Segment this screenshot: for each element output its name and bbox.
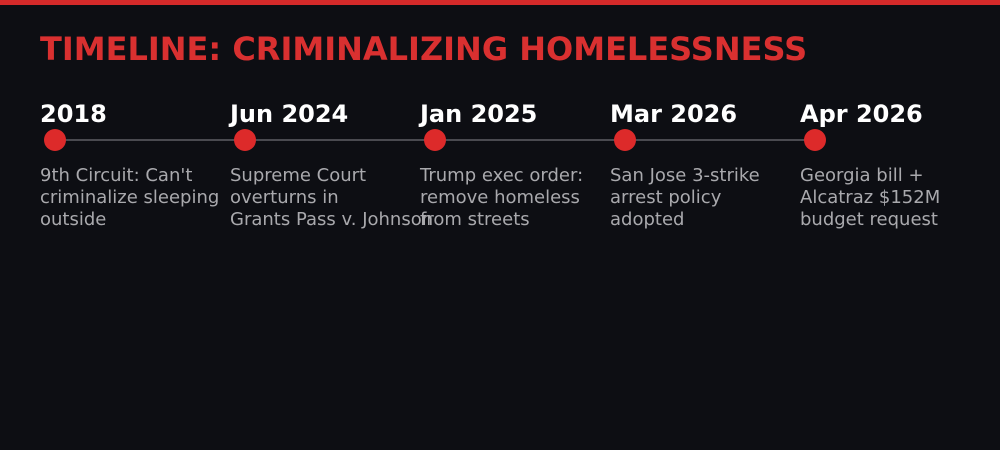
description: budget request: [800, 209, 938, 230]
description: San Jose 3-strike: [610, 165, 760, 186]
description: [420, 165, 583, 230]
description: Alcatraz $152M: [800, 187, 940, 208]
description: outside: [40, 209, 106, 230]
description: [40, 165, 219, 230]
dot marker: [424, 129, 446, 151]
description: criminalize sleeping: [40, 187, 219, 208]
title: TIMELINE: CRIMINALIZING HOMELESSNESS: [40, 30, 807, 68]
event: Mar 2026: [610, 100, 760, 230]
description: overturns in: [230, 187, 339, 208]
description: arrest policy: [610, 187, 721, 208]
dot marker: [614, 129, 636, 151]
dot marker: [234, 129, 256, 151]
dot marker: [44, 129, 66, 151]
date Mar 2026: Mar 2026: [610, 100, 737, 128]
description: [800, 165, 940, 230]
event: Jan 2025: [418, 100, 583, 230]
date Apr 2026: Apr 2026: [800, 100, 923, 128]
description: [230, 165, 433, 230]
event: 2018: [40, 100, 219, 230]
description: Trump exec order:: [420, 165, 583, 186]
description: 9th Circuit: Can't: [40, 165, 192, 186]
dot marker: [804, 129, 826, 151]
description: [610, 165, 760, 230]
description: adopted: [610, 209, 684, 230]
description: Grants Pass v. Johnson: [230, 209, 433, 230]
description: remove homeless: [420, 187, 580, 208]
description: Supreme Court: [230, 165, 366, 186]
event: Jun 2024: [228, 100, 433, 230]
description: Georgia bill +: [800, 165, 924, 186]
description: from streets: [420, 209, 530, 230]
date Jun 2024: Jun 2024: [230, 100, 348, 128]
event: Apr 2026: [800, 100, 940, 230]
date Jan 2025: Jan 2025: [420, 100, 537, 128]
date 2018: 2018: [40, 100, 107, 128]
